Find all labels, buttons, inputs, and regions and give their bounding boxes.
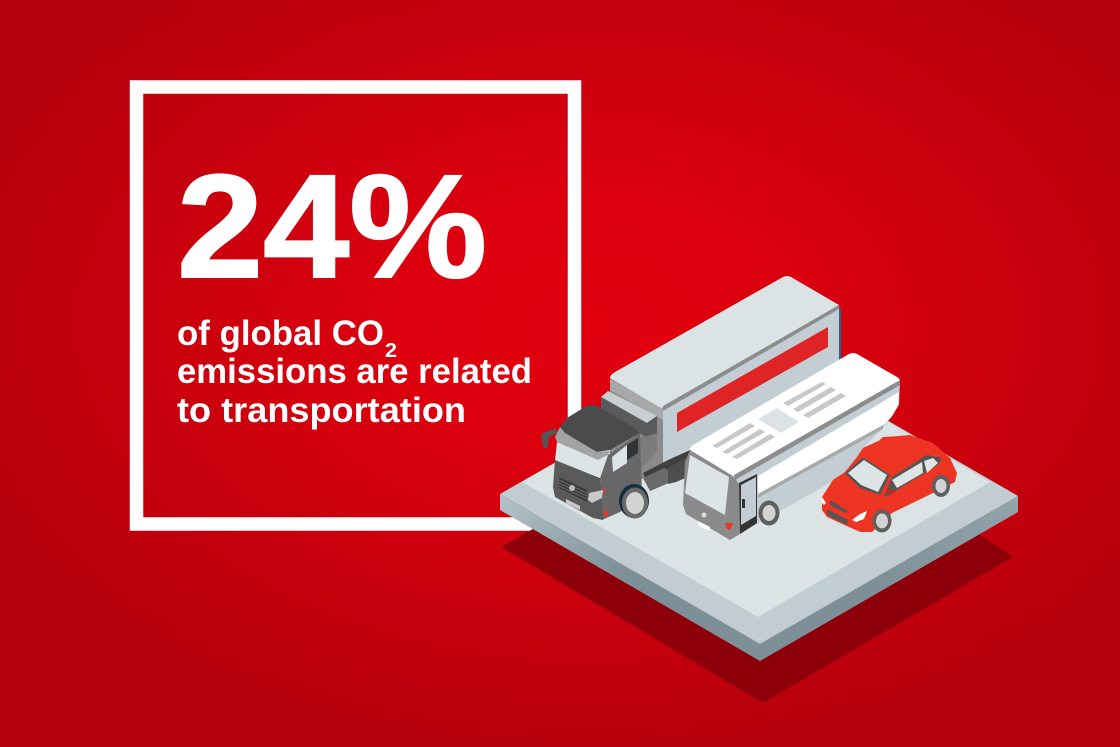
trailer side	[663, 307, 839, 464]
bus wheel	[758, 500, 780, 526]
white square frame	[136, 87, 574, 524]
mirror	[541, 428, 557, 449]
roof vents: rear	[783, 382, 846, 418]
red markers	[603, 488, 608, 516]
car body	[822, 435, 957, 532]
text block: description: to transportation	[177, 391, 466, 430]
car grille	[827, 509, 848, 525]
hood crease	[830, 500, 848, 513]
bus	[683, 353, 900, 540]
side trim	[758, 425, 883, 498]
roof edge stripe	[734, 380, 900, 480]
windshield	[555, 442, 608, 478]
car roof	[862, 436, 927, 473]
car wheels	[872, 475, 950, 532]
car windshield	[845, 457, 890, 495]
sun visor	[555, 427, 610, 460]
roof vents: front	[712, 423, 775, 459]
front wheel	[619, 484, 649, 518]
cab deflector	[601, 379, 663, 470]
bus roof	[690, 353, 900, 476]
trailer front	[610, 378, 663, 480]
text block: description: 2	[385, 340, 397, 362]
car side frame	[884, 455, 942, 497]
headline: 24%: 24%	[177, 145, 487, 309]
bus windscreen	[685, 455, 729, 515]
side windows	[758, 392, 899, 494]
mirror	[886, 489, 896, 494]
car side windows	[892, 458, 938, 488]
isometric platform	[500, 346, 1018, 661]
text block: description: of global CO	[177, 314, 384, 353]
trailer red stripe	[677, 327, 828, 432]
bus door	[739, 474, 757, 534]
bus front	[683, 450, 740, 540]
licence plate	[566, 499, 580, 510]
truck	[541, 276, 841, 520]
text block: description	[177, 314, 532, 430]
headlight	[588, 490, 603, 503]
roof hatch	[758, 408, 799, 433]
cab dark window	[627, 438, 638, 460]
logo	[569, 485, 575, 491]
cab side	[600, 433, 642, 520]
cab front	[553, 460, 603, 520]
bus headlight	[702, 512, 706, 518]
headlights	[822, 497, 867, 522]
text block: description: emissions are related	[177, 352, 532, 391]
bus side	[735, 380, 900, 534]
cab roof	[560, 405, 640, 452]
trailer roof	[610, 276, 839, 408]
grille	[559, 477, 587, 502]
bus number plate	[698, 521, 710, 531]
cab side window	[612, 445, 627, 472]
bus tail light	[725, 523, 733, 530]
chassis and fuel tank	[643, 450, 690, 491]
roof edge stripe	[663, 305, 839, 411]
car	[822, 435, 957, 532]
platform shadow	[501, 480, 1013, 703]
